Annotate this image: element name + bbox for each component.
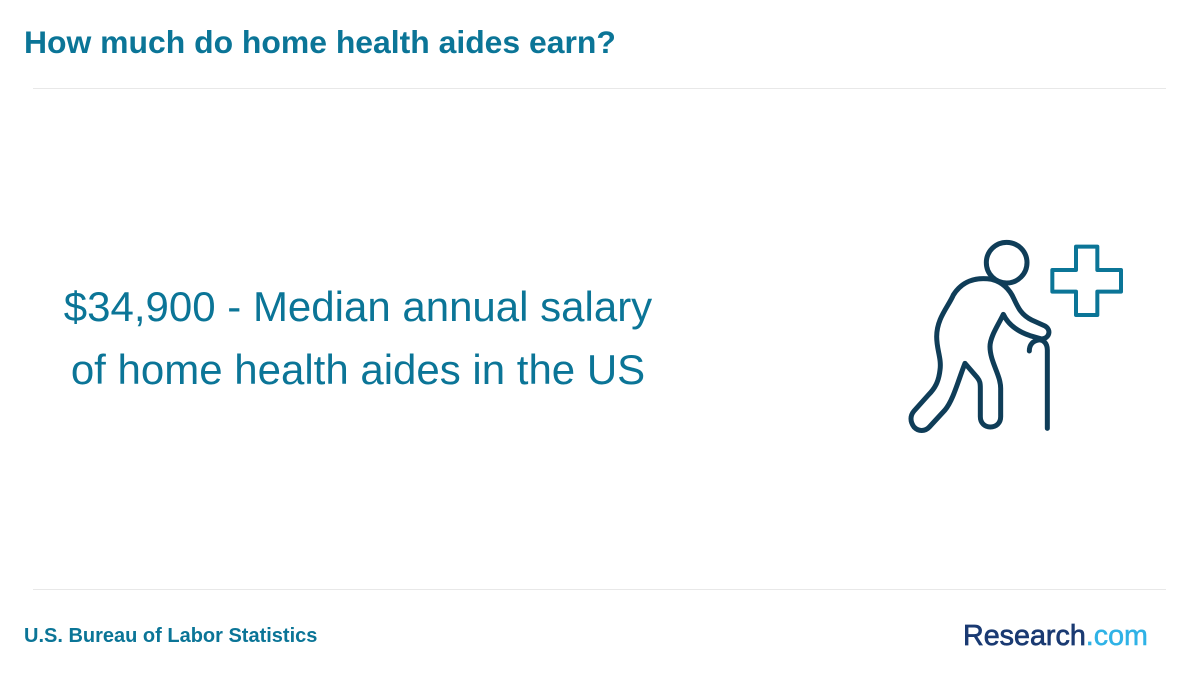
- icon: elderly person: [911, 242, 1049, 430]
- main statistic text: [64, 283, 652, 393]
- source label: U.S. Bureau of Labor Statistics: [24, 625, 317, 647]
- main statistic text: $34,900 - Median annual salary: [64, 283, 652, 330]
- main statistic text: of home health aides in the US: [71, 346, 645, 393]
- icon: elderly person with cane and medical cross: [908, 240, 1123, 433]
- logo: Research.com: Research.com: [963, 620, 1148, 652]
- title: How much do home health aides earn?: [24, 24, 616, 60]
- icon: medical cross: [1052, 247, 1121, 315]
- icon: cane: [1029, 340, 1047, 428]
